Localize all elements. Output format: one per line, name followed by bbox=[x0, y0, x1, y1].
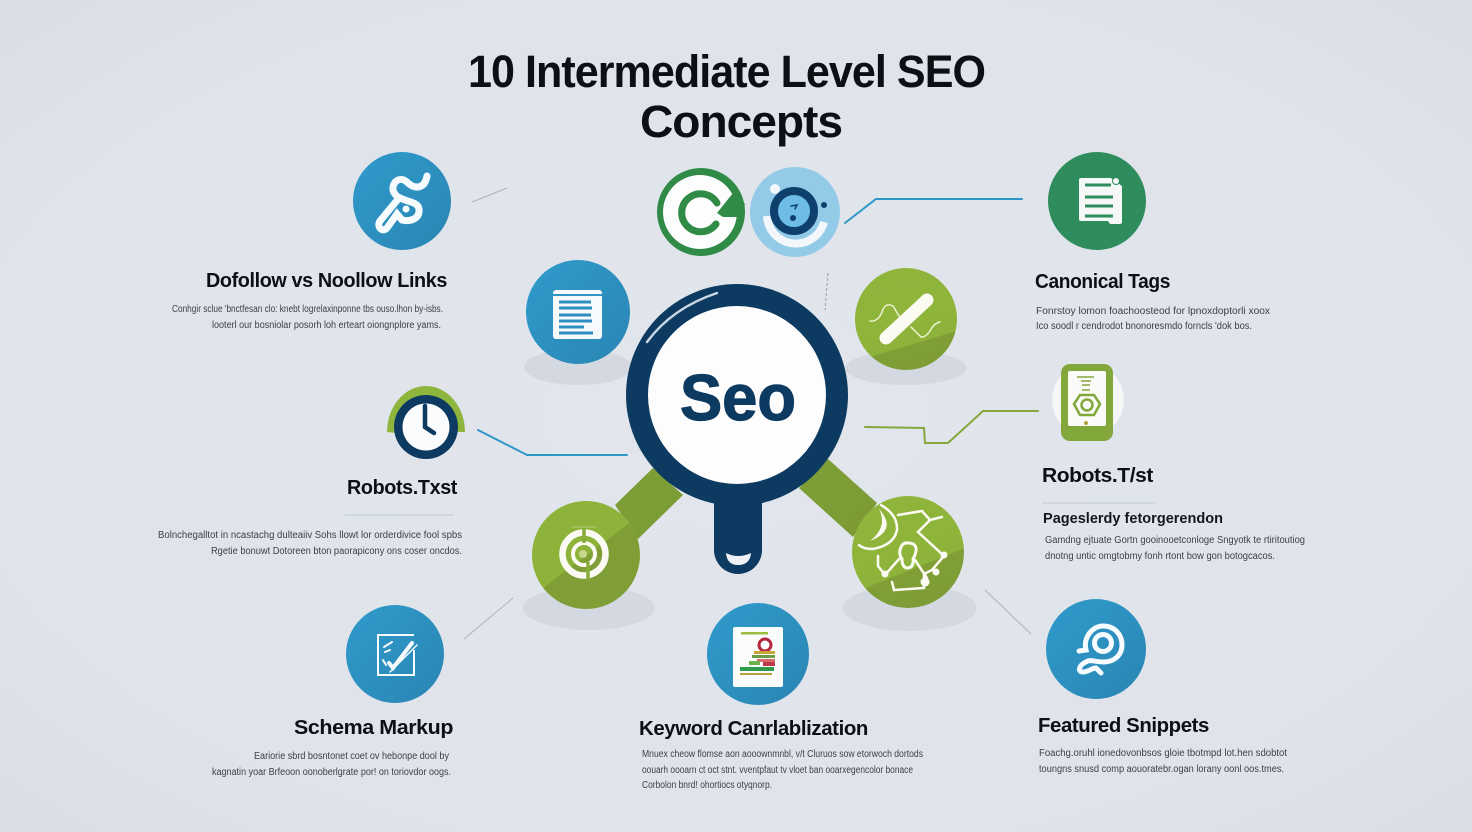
icon: clock bbox=[387, 386, 465, 459]
connector: left blue line bbox=[478, 430, 627, 455]
description: Gamdng ejtuate Gortn gooinooetconloge Sngyotk te rtiritoutiog bbox=[1045, 535, 1305, 546]
title: 10 Intermediate Level SEO bbox=[468, 46, 985, 97]
icon: blue chain link bbox=[353, 152, 451, 250]
icon: blue document bbox=[526, 260, 630, 364]
panel: canonical tags bbox=[1035, 152, 1270, 332]
panel: dofollow vs nofollow links bbox=[172, 152, 451, 331]
title: Concepts bbox=[640, 96, 842, 147]
icon: green concentric target bbox=[532, 501, 640, 609]
panel: keyword cannibalization bbox=[639, 603, 923, 791]
description: Corbolon bnrd! ohortiocs otyqnorp. bbox=[642, 780, 772, 791]
heading: Schema Markup bbox=[294, 716, 453, 739]
panel: schema markup bbox=[212, 605, 453, 778]
icon: light blue target bbox=[750, 167, 840, 257]
description bbox=[212, 751, 451, 778]
magnifying glass with Seo: Seo bbox=[680, 361, 796, 434]
description: Foachg.oruhl ionedovonbsos gloie tbotmpd lot.hen sdobtot bbox=[1039, 748, 1287, 759]
description: Bolnchegalltot in ncastachg dulteaiiv Sohs llowt lor orderdivice fool spbs bbox=[158, 530, 462, 541]
heading: Canonical Tags bbox=[1035, 270, 1170, 293]
connector: lower right grey line bbox=[985, 590, 1031, 634]
magnifying glass with Seo bbox=[626, 284, 848, 574]
description: Eariorie sbrd bosntonet coet ov hebonpe dool by bbox=[254, 751, 449, 762]
description bbox=[1036, 306, 1270, 332]
description bbox=[1039, 748, 1287, 775]
description: toungns snusd comp aouoratebr.ogan lorany oonl oos.tmes. bbox=[1039, 764, 1284, 775]
subheading: Pageslerdy fetorgerendon bbox=[1043, 510, 1223, 527]
heading: Dofollow vs Noollow Links bbox=[206, 269, 447, 292]
heading: Robots.Txst bbox=[347, 476, 458, 499]
icon shadows bbox=[523, 349, 977, 631]
description bbox=[642, 749, 923, 791]
icon: checklist bbox=[346, 605, 444, 703]
divider bbox=[345, 514, 454, 516]
connector: top left grey line bbox=[472, 188, 507, 202]
description: kagnatin yoar Brfeoon oonoberlgrate por! on toriovdor oogs. bbox=[212, 767, 451, 778]
panel: featured snippets bbox=[1038, 599, 1287, 775]
description: Mnuex cheow flomse aon aooownmnbl, v/t Cluruos sow etorwoch dortods bbox=[642, 749, 923, 760]
description: dnotng untic omgtobmy fonh rtont bow gon botogcacos. bbox=[1045, 551, 1275, 562]
connector: top right blue line bbox=[845, 199, 1022, 223]
heading: Keyword Canrlablization bbox=[639, 717, 868, 740]
connector: right green line bbox=[865, 411, 1038, 443]
description: Rgetie bonuwt Dotoreen bton paorapicony ons coser oncdos. bbox=[211, 546, 462, 557]
icon: green document bbox=[1048, 152, 1146, 250]
description: looterl our bosniolar posorh loh erteart oiongnplore yams. bbox=[212, 320, 441, 331]
description bbox=[1045, 535, 1305, 562]
icon: report document bbox=[707, 603, 809, 705]
title bbox=[468, 46, 985, 147]
heading: Featured Snippets bbox=[1038, 714, 1209, 737]
icon: green pencil bbox=[855, 268, 957, 370]
description: Conhgir sclue 'bnctfesan clo: knebt logrelaxinponne tbs ouso.lhon by-isbs. bbox=[172, 304, 443, 315]
icon: green phone bbox=[1052, 364, 1124, 441]
divider bbox=[1042, 502, 1155, 504]
magnifying glass arms bbox=[615, 459, 877, 539]
description: Fonrstoy lomon foachoosteod for lpnoxdoptorli xoox bbox=[1036, 306, 1270, 317]
description bbox=[158, 530, 462, 557]
description: oouarh oooarn ct oct stnt. vventpfaut tv vloet ban ooarxegencolor bonace bbox=[642, 765, 913, 776]
description bbox=[172, 304, 443, 331]
icon: blue snippet search bbox=[1046, 599, 1146, 699]
heading: Robots.T/st bbox=[1042, 464, 1154, 487]
panel: robots.txt left bbox=[158, 386, 465, 557]
description: Ico soodl r cendrodot bnonoresmdo forncls 'dok bos. bbox=[1036, 321, 1252, 332]
icon: green network bbox=[852, 496, 964, 608]
connector: dashed grey line bbox=[825, 273, 828, 310]
connector: lower left grey line bbox=[464, 598, 513, 639]
icon: green C bbox=[657, 168, 745, 256]
panel: robots.txt right bbox=[1042, 364, 1305, 562]
